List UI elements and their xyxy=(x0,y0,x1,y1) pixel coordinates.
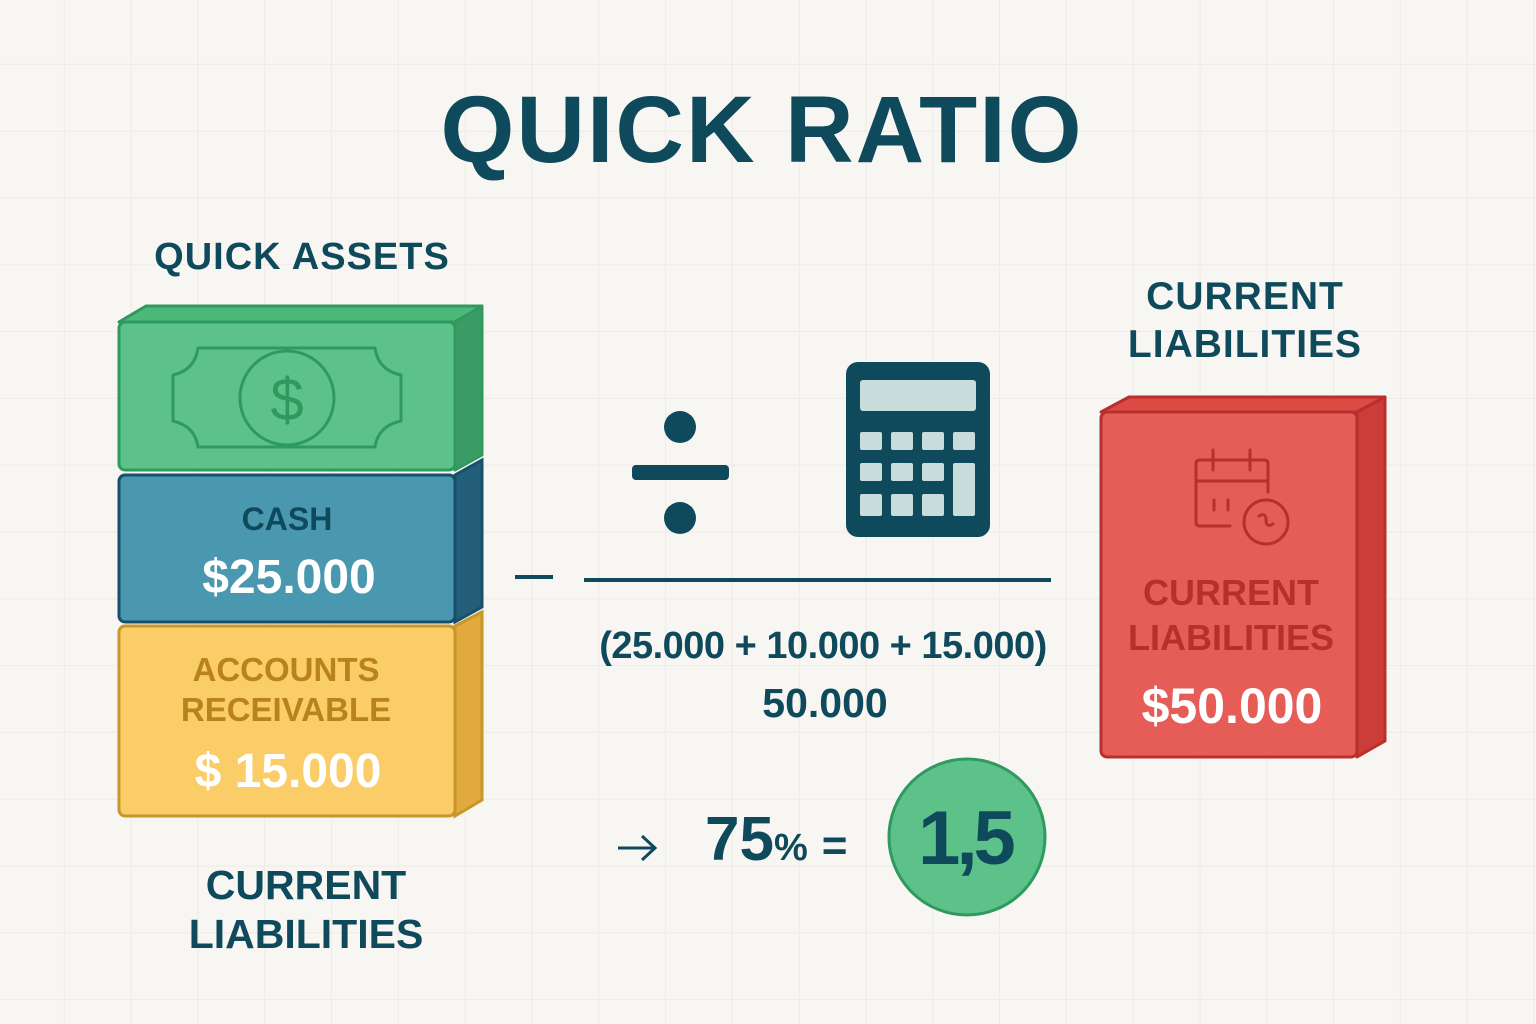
icon: calculator xyxy=(846,362,990,537)
icon: banknote: $ xyxy=(270,366,304,433)
block: accounts receivable: ACCOUNTS xyxy=(192,651,380,688)
heading: current liabilities right: CURRENT xyxy=(1146,275,1344,318)
block: accounts receivable: $ 15.000 xyxy=(195,745,381,798)
block: cash: CASH xyxy=(242,501,332,537)
heading: quick assets: QUICK ASSETS xyxy=(154,236,450,278)
result circle: 1,5 xyxy=(918,796,1015,881)
fraction line xyxy=(584,578,1051,582)
text: current liabilities bottom left: LIABILITIES xyxy=(189,911,423,957)
block: current liabilities red: LIABILITIES xyxy=(1128,617,1334,658)
block: cash: $25.000 xyxy=(202,551,376,604)
block: cash xyxy=(119,460,482,622)
result circle xyxy=(889,759,1045,915)
block: current liabilities red xyxy=(1101,397,1385,757)
block: current liabilities red: CURRENT xyxy=(1143,572,1319,613)
heading: current liabilities right: LIABILITIES xyxy=(1128,323,1362,366)
title: QUICK RATIO xyxy=(441,77,1083,183)
text: current liabilities bottom left xyxy=(189,862,423,957)
formula numerator: (25.000 + 10.000 + 15.000) xyxy=(599,625,1047,667)
formula total: 50.000 xyxy=(762,680,888,726)
icon: divide sign xyxy=(632,411,729,534)
minus sign xyxy=(515,575,553,579)
block: green money xyxy=(119,306,482,470)
icon: banknote xyxy=(173,348,401,447)
block: accounts receivable: RECEIVABLE xyxy=(181,691,391,728)
text: current liabilities bottom left: CURRENT xyxy=(206,862,406,908)
heading: current liabilities right xyxy=(1128,275,1362,366)
icon: calendar clock xyxy=(1196,450,1288,544)
block: accounts receivable xyxy=(119,612,482,816)
block: current liabilities red: $50.000 xyxy=(1142,678,1322,734)
result text: 75% = xyxy=(705,805,847,874)
arrow xyxy=(618,836,655,860)
